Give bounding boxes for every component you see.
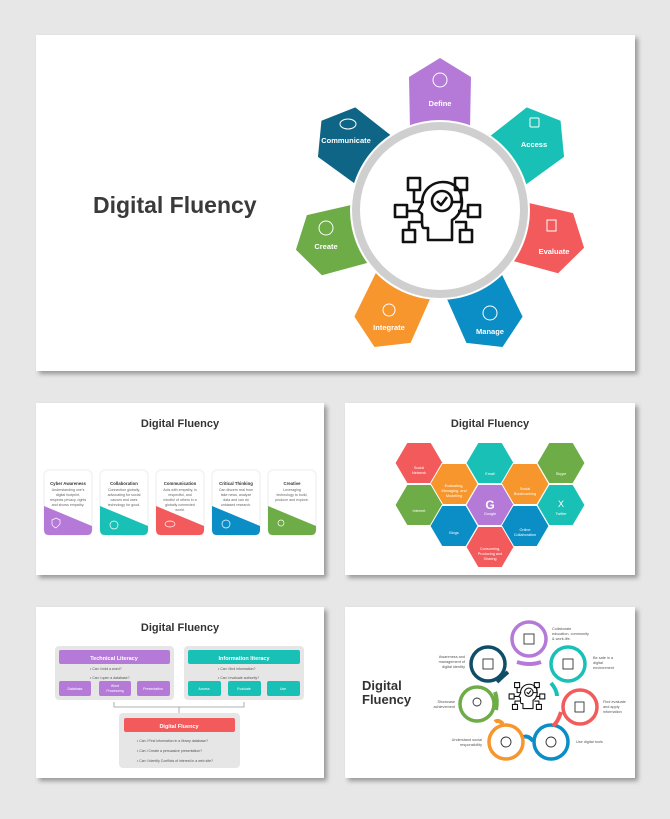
box: technical literacy: Processing (106, 689, 124, 693)
card: critical thinking (212, 470, 260, 535)
segment: communicate (303, 96, 396, 188)
hex grid: Managing, and (441, 489, 467, 493)
card: communication: respectful, and (168, 493, 192, 497)
segment: evaluate (509, 201, 592, 278)
segment: communicate: Communicate (321, 136, 371, 145)
title: Digital Fluency (93, 192, 257, 218)
card: communication: globally connected (165, 503, 195, 507)
card: creative: produce and explore. (275, 498, 309, 502)
hex grid: Sharing (483, 557, 497, 561)
icon: center (509, 683, 545, 709)
hex grid: Bookmarking (514, 492, 536, 496)
segment: integrate (346, 270, 432, 360)
card: cyber awareness: digital footprint, (56, 493, 80, 497)
hex grid: Evaluating, (445, 484, 463, 488)
hex grid: Social (520, 487, 530, 491)
labels: Awareness and (439, 655, 465, 659)
hex grid: Network (412, 471, 426, 475)
box: technical literacy: Database (68, 687, 83, 691)
card: creative: Creative (284, 481, 301, 486)
labels: & work-life. (552, 637, 571, 641)
heading: Digital Fluency (141, 622, 220, 634)
hex grid: X (558, 499, 564, 509)
card: critical thinking: Can discern real from (219, 488, 253, 492)
labels: environment (593, 666, 615, 670)
small icons (473, 634, 584, 747)
segment: integrate: Integrate (373, 323, 405, 332)
rings (460, 622, 597, 759)
slide: ring cycle (345, 607, 635, 778)
card: communication: mindful of others in a (163, 498, 197, 502)
card: collaboration: causes and uses (111, 498, 138, 502)
labels: digital identity (442, 665, 465, 669)
segment: access (486, 96, 579, 188)
hex grid: Skype (556, 472, 566, 476)
card: creative: technology to build, (277, 493, 307, 497)
box: information literacy: Access (198, 687, 210, 691)
slide: hexagons (345, 403, 635, 575)
slide: main digital fluency (36, 35, 635, 371)
box: information literacy: Use (280, 687, 286, 691)
segment: define: Define (429, 99, 451, 108)
card: collaboration (100, 470, 148, 535)
labels: achievement (433, 705, 456, 709)
box: technical literacy: • Can I bold a word? (90, 667, 122, 671)
labels: Showcase (437, 700, 455, 704)
box: digital fluency (119, 713, 240, 768)
icon: head network (395, 178, 480, 242)
card: cyber awareness: Understanding one's (52, 488, 85, 492)
labels: education, community (552, 632, 589, 636)
card: cyber awareness: Cyber Awareness (50, 481, 87, 486)
segment: evaluate: Evaluate (539, 247, 569, 256)
hex grid: Twitter (555, 512, 567, 516)
card: cyber awareness (44, 470, 92, 535)
box: information literacy: Information literacy (218, 656, 270, 662)
labels: Understand social (452, 738, 482, 742)
card: creative: Leveraging (283, 488, 301, 492)
hex grid: Consuming, (480, 547, 500, 551)
hex grid: Online (520, 528, 530, 532)
card: critical thinking: Critical Thinking (219, 481, 253, 486)
hex grid: Google (484, 512, 496, 516)
card: communication: world. (175, 508, 185, 512)
hex grid: G (485, 498, 495, 512)
labels: digital (593, 661, 603, 665)
card: cyber awareness: and shows empathy. (52, 503, 84, 507)
labels: management of (439, 660, 466, 664)
segment: create (288, 203, 371, 280)
labels (433, 627, 626, 747)
slide: literacy diagram (36, 607, 324, 778)
card: collaboration: advocating for social (108, 493, 141, 497)
card: critical thinking: data and can do (223, 498, 249, 502)
center ring (350, 120, 530, 300)
labels: responsibility (460, 743, 482, 747)
heading: Digital Fluency (451, 418, 530, 430)
hex grid: Social (414, 466, 424, 470)
heading: Digital Fluency (141, 418, 220, 430)
labels: information (603, 710, 622, 714)
card: collaboration: Collaboration (110, 481, 138, 486)
card: cyber awareness: respects privacy, rights (50, 498, 86, 502)
segment: access: Access (521, 140, 547, 149)
box: digital fluency: • Can I Find information in a library database? (137, 739, 208, 743)
labels: Be safe in a (593, 656, 614, 660)
segment: manage: Manage (476, 327, 504, 336)
hex grid: Email (485, 472, 495, 476)
labels: Use digital tools (576, 740, 603, 744)
hex grid: Collaboration (514, 533, 536, 537)
box: digital fluency: Digital Fluency (159, 724, 199, 730)
hex grid (395, 442, 585, 568)
heading: Digital (362, 678, 402, 693)
box: technical literacy: Technical Literacy (90, 656, 139, 662)
box: technical literacy: Presentation (143, 687, 163, 691)
arrows (495, 662, 561, 741)
card: communication: Communication (164, 481, 197, 486)
hex grid: Modelling (446, 494, 462, 498)
card: creative (268, 470, 316, 535)
card: collaboration: technology for good. (108, 503, 140, 507)
segment: create: Create (314, 242, 338, 251)
slide: cards (36, 403, 324, 575)
labels: Find evaluate (603, 700, 626, 704)
box: information literacy (184, 646, 304, 700)
box: digital fluency: • Can I Identify Conflicts of interest in a web site? (137, 759, 213, 763)
box: information literacy: • Can I evaluate authority? (218, 676, 259, 680)
labels: Collaborate (552, 627, 571, 631)
card: critical thinking: fake news, analyze (221, 493, 251, 497)
box: technical literacy (55, 646, 174, 700)
card: communication (156, 470, 204, 535)
card: critical thinking: unbiased research. (221, 503, 251, 507)
hex grid: Internet (413, 509, 426, 513)
box: technical literacy: Word (111, 684, 119, 688)
hex grid: Producing and (478, 552, 502, 556)
box: information literacy: Evaluate (237, 687, 251, 691)
box: technical literacy: • Can I open a database? (90, 676, 130, 680)
hex grid: Blogs (449, 531, 459, 535)
heading: Fluency (362, 692, 412, 707)
segment: define (409, 58, 471, 128)
card: communication: Acts with empathy, is (163, 488, 197, 492)
box: digital fluency: • Can I Create a persuasive presentation? (137, 749, 202, 753)
box: information literacy: • Can I find information? (218, 667, 255, 671)
connector (114, 702, 244, 713)
card: collaboration: Connection globally, (108, 488, 140, 492)
segment: manage (445, 270, 531, 360)
labels: and apply (603, 705, 620, 709)
